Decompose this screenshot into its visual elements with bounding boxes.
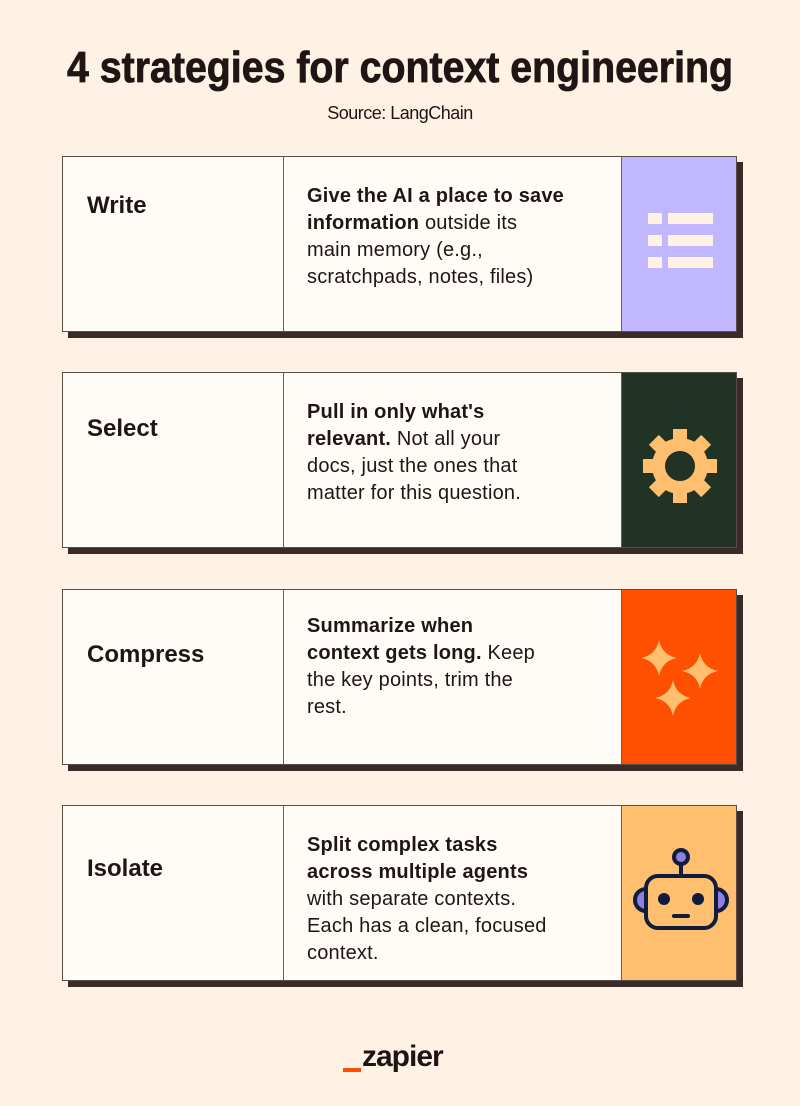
title — [67, 43, 733, 123]
text: write: Give the AI a place to save — [307, 185, 564, 207]
card: select — [62, 372, 737, 548]
text: write: information outside its — [307, 212, 517, 234]
text: select: Pull in only what's — [307, 401, 484, 423]
title: Source: LangChain — [327, 103, 473, 123]
text: isolate: across multiple agents — [307, 861, 528, 883]
text: select: relevant. Not all your — [307, 428, 500, 450]
text: select: matter for this question. — [307, 482, 521, 504]
text: compress: the key points, trim the — [307, 669, 513, 691]
text: write: scratchpads, notes, files) — [307, 266, 533, 288]
icon: robot — [621, 806, 736, 980]
text: isolate: context. — [307, 942, 379, 964]
text: isolate: with separate contexts. — [307, 888, 516, 910]
icon: gear — [621, 373, 736, 547]
text: isolate: Each has a clean, focused — [307, 915, 547, 937]
label: compress: Compress — [87, 641, 204, 668]
title: 4 strategies for context engineering — [67, 43, 733, 92]
label: select: Select — [87, 415, 158, 442]
card: isolate — [62, 805, 737, 981]
text: write — [307, 185, 564, 288]
text: isolate — [307, 834, 547, 964]
text: compress: Summarize when — [307, 615, 473, 637]
text: select: docs, just the ones that — [307, 455, 517, 477]
text: write: main memory (e.g., — [307, 239, 483, 261]
text: compress: context gets long. Keep — [307, 642, 535, 664]
label: isolate: Isolate — [87, 855, 163, 882]
card: write — [62, 156, 737, 332]
logo: zapier: zapier — [362, 1040, 443, 1073]
card: compress — [62, 589, 737, 765]
text: isolate: Split complex tasks — [307, 834, 498, 856]
icon: list — [621, 157, 736, 331]
text: compress — [307, 615, 535, 718]
label: write: Write — [87, 192, 147, 219]
text: compress: rest. — [307, 696, 347, 718]
text: select — [307, 401, 521, 504]
icon: sparkles — [621, 590, 736, 764]
